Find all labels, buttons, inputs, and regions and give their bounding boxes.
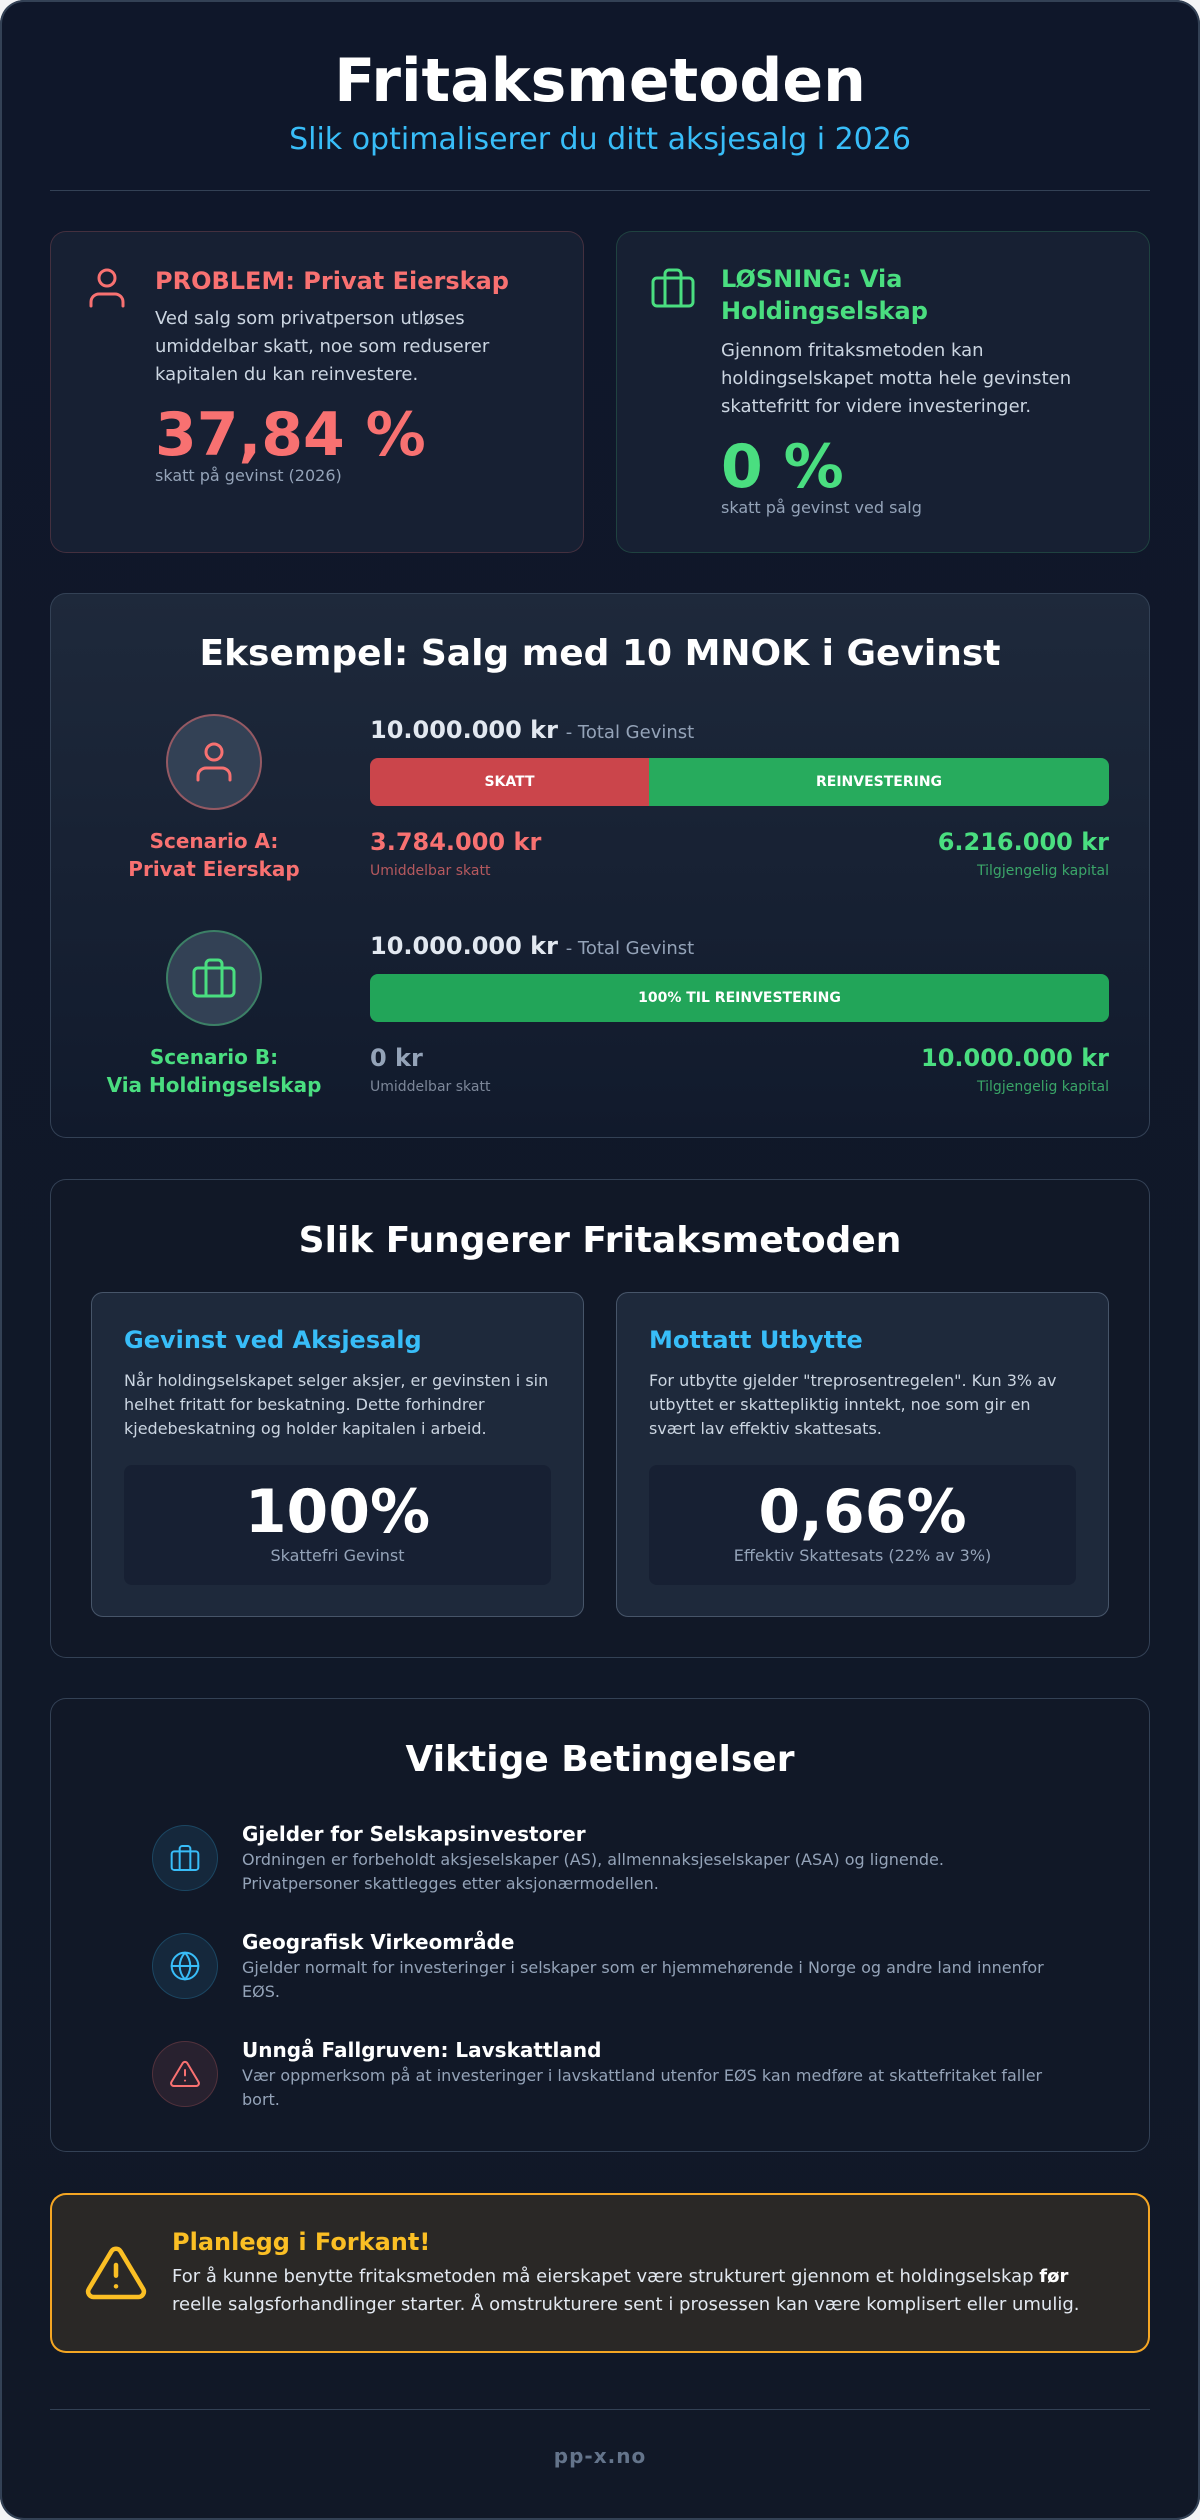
scenario A label: Scenario A: — [150, 829, 278, 853]
problem text — [155, 308, 490, 385]
solution heading: Holdingselskap — [721, 297, 928, 325]
stat box — [124, 1465, 551, 1585]
card heading: Mottatt Utbytte — [649, 1326, 863, 1354]
problem heading: PROBLEM: Privat Eierskap — [155, 267, 509, 295]
condition 3 text: Vær oppmerksom på at investeringer i lavskattland utenfor EØS kan medføre at skattefritaket faller — [242, 2066, 1042, 2085]
icon: briefcase — [192, 958, 236, 998]
condition 2 text — [242, 1958, 1044, 2001]
condition 1 text: Ordningen er forbeholdt aksjeselskaper (AS), allmennaksjeselskaper (ASA) og lignende. — [242, 1850, 944, 1869]
panel: problem — [50, 231, 584, 553]
stat box — [649, 1465, 1076, 1585]
solution text: Gjennom fritaksmetoden kan — [721, 340, 984, 361]
condition 2 text: Gjelder normalt for investeringer i selskaper som er hjemmehørende i Norge og andre land innenfor — [242, 1958, 1044, 1977]
callout heading: Planlegg i Forkant! — [172, 2228, 430, 2256]
solution heading — [721, 265, 928, 325]
solution text — [721, 340, 1071, 417]
condition 3 icon — [152, 2041, 218, 2107]
problem stat: 37,84 % — [155, 400, 426, 470]
condition 3 title: Unngå Fallgruven: Lavskattland — [242, 2038, 601, 2062]
callout: plan ahead — [50, 2193, 1150, 2353]
panel: conditions — [50, 1698, 1150, 2152]
panel: example — [50, 593, 1150, 1138]
condition 1 text — [242, 1850, 944, 1893]
scenario A bar — [370, 758, 1109, 806]
stat label: Effektiv Skattesats (22% av 3%) — [734, 1546, 991, 1565]
scenario A capital value: 6.216.000 kr — [938, 828, 1109, 856]
icon: person — [90, 268, 124, 308]
condition 2 title: Geografisk Virkeområde — [242, 1930, 514, 1954]
subtitle: Slik optimaliserer du ditt aksjesalg i 2026 — [289, 122, 911, 157]
icon: warning — [86, 2246, 146, 2300]
problem stat label: skatt på gevinst (2026) — [155, 466, 342, 485]
scenario B capital caption: Tilgjengelig kapital — [977, 1079, 1109, 1095]
tax segment: SKATT — [484, 774, 535, 790]
scenario B total: 10.000.000 kr - Total Gevinst — [370, 932, 694, 960]
panel: how it works — [50, 1179, 1150, 1658]
card heading: Gevinst ved Aksjesalg — [124, 1326, 422, 1354]
problem text: umiddelbar skatt, noe som reduserer — [155, 336, 489, 357]
problem text: kapitalen du kan reinvestere. — [155, 364, 418, 385]
example heading: Eksempel: Salg med 10 MNOK i Gevinst — [200, 633, 1000, 674]
stat value: 100% — [245, 1477, 430, 1547]
card text — [124, 1371, 548, 1438]
stat label: Skattefri Gevinst — [270, 1546, 404, 1565]
card text: svært lav effektiv skattesats. — [649, 1419, 882, 1438]
card text: Når holdingselskapet selger aksjer, er gevinsten i sin — [124, 1371, 548, 1390]
footer brand: pp-x.no — [554, 2444, 646, 2468]
icon: warning — [170, 2060, 200, 2087]
reinvestment segment — [649, 758, 1109, 806]
icon: briefcase — [652, 268, 694, 308]
callout text: reelle salgsforhandlinger starter. Å omstrukturere sent i prosessen kan være komplisert eller umulig. — [172, 2294, 1079, 2315]
tax segment — [370, 758, 649, 806]
card text: For utbytte gjelder "treprosentregelen". Kun 3% av — [649, 1371, 1056, 1390]
scenario A total: 10.000.000 kr - Total Gevinst — [370, 716, 694, 744]
condition 2 text: EØS. — [242, 1982, 280, 2001]
condition 2 icon — [152, 1933, 218, 1999]
condition 1 title: Gjelder for Selskapsinvestorer — [242, 1822, 586, 1846]
callout text: For å kunne benytte fritaksmetoden må eierskapet være strukturert gjennom et holdingselskap før — [172, 2266, 1068, 2287]
scenario A tax caption: Umiddelbar skatt — [370, 863, 490, 879]
scenario A capital caption: Tilgjengelig kapital — [977, 863, 1109, 879]
callout text — [172, 2266, 1079, 2315]
solution text: skattefritt for videre investeringer. — [721, 396, 1031, 417]
icon: globe — [170, 1952, 200, 1980]
card: capital gains — [91, 1292, 584, 1617]
scenario A circle icon — [166, 714, 262, 810]
scenario B label: Via Holdingselskap — [107, 1073, 321, 1097]
card text: helhet fritatt for beskatning. Dette forhindrer — [124, 1395, 485, 1414]
condition 3 text — [242, 2066, 1042, 2109]
conditions heading: Viktige Betingelser — [406, 1739, 794, 1780]
card: dividends — [616, 1292, 1109, 1617]
scenario B label: Scenario B: — [150, 1045, 278, 1069]
how it works heading: Slik Fungerer Fritaksmetoden — [299, 1220, 901, 1261]
scenario B tax caption: Umiddelbar skatt — [370, 1079, 490, 1095]
title: Fritaksmetoden — [334, 46, 866, 116]
card text: utbyttet er skattepliktig inntekt, noe som gir en — [649, 1395, 1031, 1414]
card text — [649, 1371, 1056, 1438]
scenario B circle icon — [166, 930, 262, 1026]
scenario B tax value: 0 kr — [370, 1044, 423, 1072]
scenario B capital value: 10.000.000 kr — [921, 1044, 1109, 1072]
reinvestment segment — [370, 974, 1109, 1022]
panel: solution — [616, 231, 1150, 553]
condition 3 text: bort. — [242, 2090, 280, 2109]
solution stat label: skatt på gevinst ved salg — [721, 498, 922, 517]
condition 1 text: Privatpersoner skattlegges etter aksjonærmodellen. — [242, 1874, 659, 1893]
condition 1 icon — [152, 1825, 218, 1891]
stat value: 0,66% — [758, 1477, 967, 1547]
reinvestment segment: REINVESTERING — [816, 774, 942, 790]
solution stat: 0 % — [721, 432, 844, 502]
solution heading: LØSNING: Via — [721, 265, 902, 293]
scenario A label: Privat Eierskap — [128, 857, 300, 881]
card text: kjedebeskatning og holder kapitalen i arbeid. — [124, 1419, 487, 1438]
scenario B label — [106, 1045, 321, 1097]
scenario A label — [128, 829, 300, 881]
icon: person — [196, 742, 232, 782]
icon: briefcase — [170, 1845, 200, 1871]
solution text: holdingselskapet motta hele gevinsten — [721, 368, 1071, 389]
reinvestment segment: 100% TIL REINVESTERING — [638, 990, 841, 1006]
problem text: Ved salg som privatperson utløses — [155, 308, 465, 329]
scenario A tax value: 3.784.000 kr — [370, 828, 541, 856]
